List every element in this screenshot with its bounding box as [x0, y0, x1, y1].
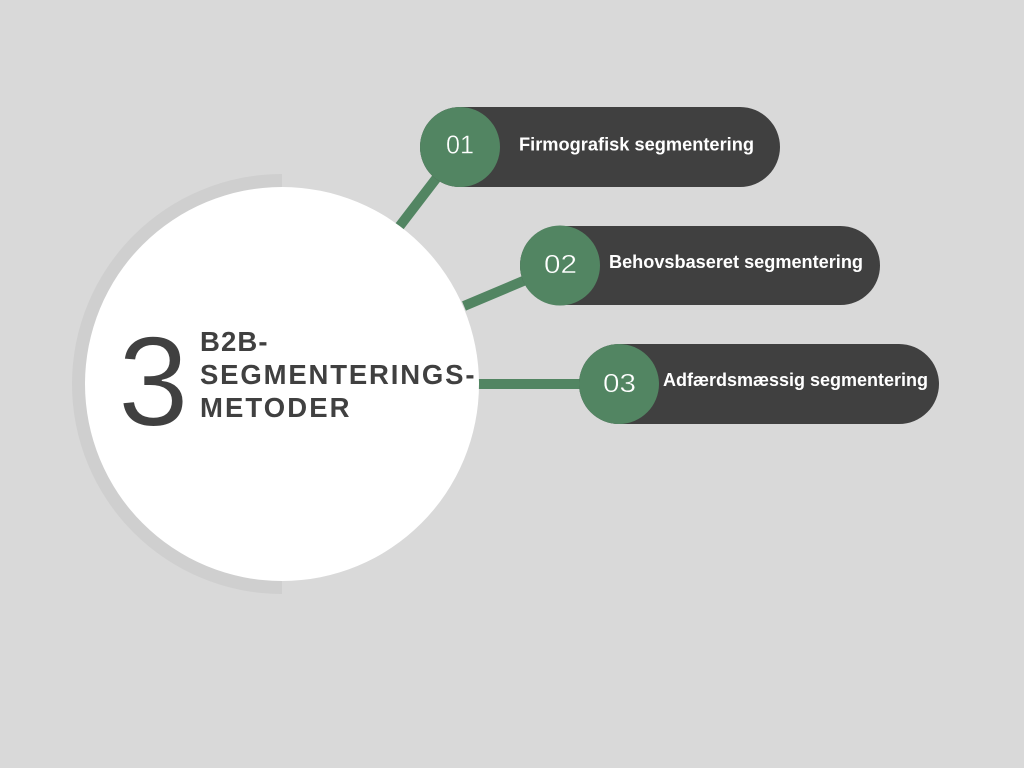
decorative half ring — [72, 174, 282, 594]
item 01 — [420, 107, 780, 187]
item 01: Firmografisk segmentering — [519, 134, 754, 154]
item 01: 01 — [446, 130, 474, 160]
central circle — [85, 187, 479, 581]
heading: SEGMENTERINGS- — [200, 359, 474, 390]
item 02: 02 — [544, 249, 577, 279]
heading: B2B- — [200, 326, 268, 357]
item 03: 03 — [603, 368, 636, 398]
heading: METODER — [200, 392, 350, 423]
item 03: Adfærdsmæssig segmentering — [663, 370, 928, 390]
item 02 — [520, 226, 880, 306]
item 02: Behovsbaseret segmentering — [609, 252, 863, 272]
connector lines — [399, 174, 582, 389]
big numeral 3: 3 — [118, 310, 189, 452]
item 03 — [579, 344, 939, 424]
